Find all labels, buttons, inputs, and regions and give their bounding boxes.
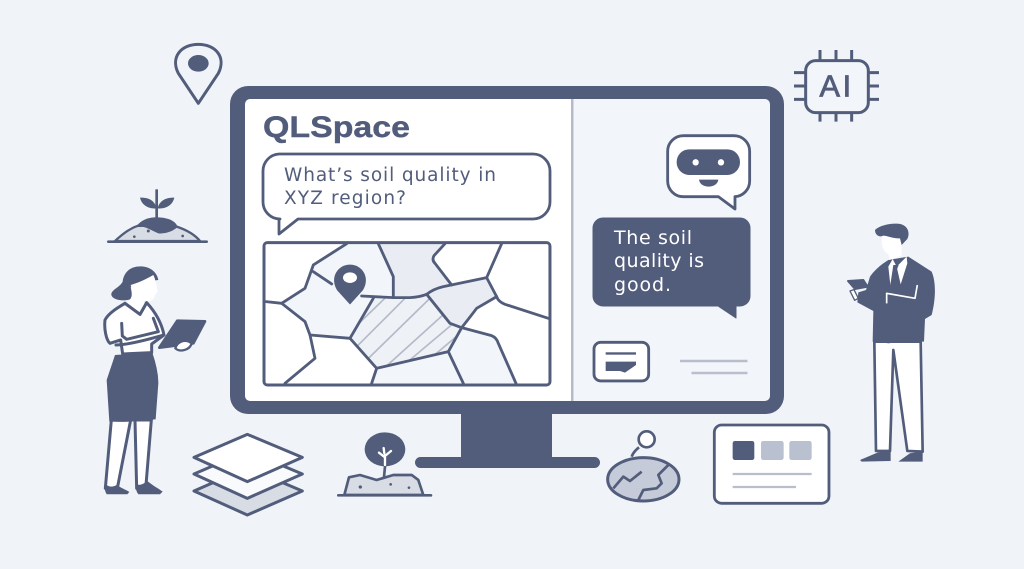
legs (105, 420, 151, 488)
tablet (159, 321, 205, 348)
shirt (105, 303, 164, 354)
face (126, 275, 158, 313)
skirt (107, 353, 158, 422)
shoes (860, 451, 923, 462)
map frame (264, 243, 550, 385)
icon: sprout on soil (108, 189, 207, 242)
trousers (874, 342, 923, 452)
monitor stand (415, 410, 600, 468)
icon: globe with marker (608, 431, 679, 501)
screen right panel (572, 99, 770, 401)
answer bubble: The soil (613, 227, 692, 249)
hand left (850, 290, 858, 300)
map (264, 243, 550, 385)
icon: AI chip (794, 50, 879, 122)
phone (848, 280, 868, 289)
panel: dashboard card (714, 425, 829, 503)
icon: stacked layers (194, 434, 302, 515)
hair (111, 266, 158, 300)
answer bubble: good. (614, 274, 671, 296)
screen left panel (245, 99, 572, 401)
question bubble: What’s soil quality in (284, 165, 496, 186)
shirt collar and tie (888, 257, 907, 288)
map regions (282, 244, 516, 383)
hand right (867, 287, 885, 302)
hatched region (352, 296, 460, 366)
icon: location pin (176, 44, 221, 103)
jacket (857, 257, 935, 343)
question bubble (263, 154, 550, 234)
arm (116, 318, 164, 345)
divider (571, 99, 574, 401)
answer bubble (593, 218, 750, 318)
sleeve line (887, 285, 917, 303)
text placeholder lines (680, 361, 748, 373)
person: man with phone (848, 224, 935, 462)
icon: AI chip: AI (820, 70, 854, 104)
map borders (266, 244, 548, 383)
hand (175, 341, 192, 350)
monitor (230, 86, 784, 468)
question bubble: XYZ region? (284, 188, 406, 209)
shoes (105, 481, 163, 494)
person: woman with tablet (105, 266, 205, 494)
title: QLSpace (263, 111, 410, 144)
icon: small message card (594, 342, 649, 381)
icon: tree on soil (338, 432, 431, 495)
icon: chatbot bubble (668, 136, 750, 209)
hair (875, 224, 909, 245)
answer bubble: quality is (614, 250, 704, 272)
face (882, 236, 902, 260)
monitor frame (230, 86, 784, 414)
map pin (334, 265, 366, 304)
